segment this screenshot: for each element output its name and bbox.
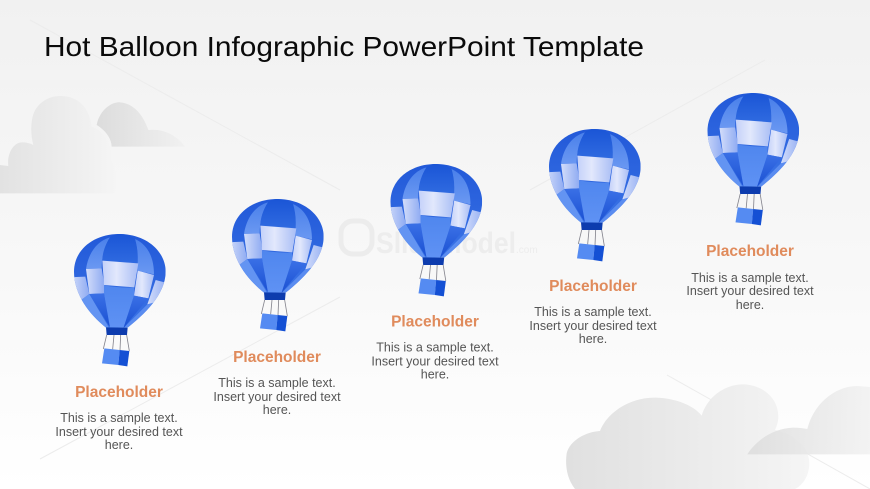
- text block 5: here.: [736, 298, 764, 312]
- text block 1: Insert your desired text: [55, 425, 183, 439]
- text block 4: here.: [579, 332, 607, 346]
- text block 3: [371, 314, 499, 382]
- balloon 1: [70, 232, 170, 366]
- watermark: [341, 221, 538, 260]
- text block 5: Insert your desired text: [686, 284, 814, 298]
- title: Hot Balloon Infographic PowerPoint Template: [44, 31, 644, 62]
- balloon 2: [228, 197, 328, 331]
- text block 4: [529, 278, 657, 346]
- text block 1: This is a sample text.: [60, 411, 178, 425]
- text block 2: Placeholder: [233, 349, 321, 366]
- text block 2: This is a sample text.: [218, 376, 336, 390]
- text block 2: Insert your desired text: [213, 390, 341, 404]
- text block 5: Placeholder: [706, 243, 794, 260]
- text block 5: This is a sample text.: [691, 271, 809, 285]
- text block 4: Insert your desired text: [529, 319, 657, 333]
- cloud top right of pair: [97, 102, 185, 147]
- text block 4: This is a sample text.: [534, 305, 652, 319]
- text block 3: Insert your desired text: [371, 354, 499, 368]
- text block 3: Placeholder: [391, 314, 479, 330]
- text block 1: here.: [105, 438, 133, 452]
- cloud top left: [0, 96, 116, 193]
- balloon 4: [545, 127, 645, 261]
- balloon 3: [386, 162, 486, 296]
- text block 4: Placeholder: [549, 278, 637, 295]
- text block 5: [686, 243, 814, 312]
- balloon 5: [703, 91, 803, 225]
- text block 3: here.: [421, 368, 449, 382]
- text block 2: here.: [263, 403, 291, 417]
- text block 1: [55, 384, 183, 452]
- watermark: .com: [516, 245, 538, 256]
- text block 2: [213, 349, 341, 417]
- text block 3: This is a sample text.: [376, 340, 494, 354]
- text block 1: Placeholder: [75, 384, 163, 401]
- cloud bottom large: [566, 384, 809, 489]
- cloud bottom right: [747, 386, 870, 454]
- watermark: SlideModel: [376, 227, 516, 260]
